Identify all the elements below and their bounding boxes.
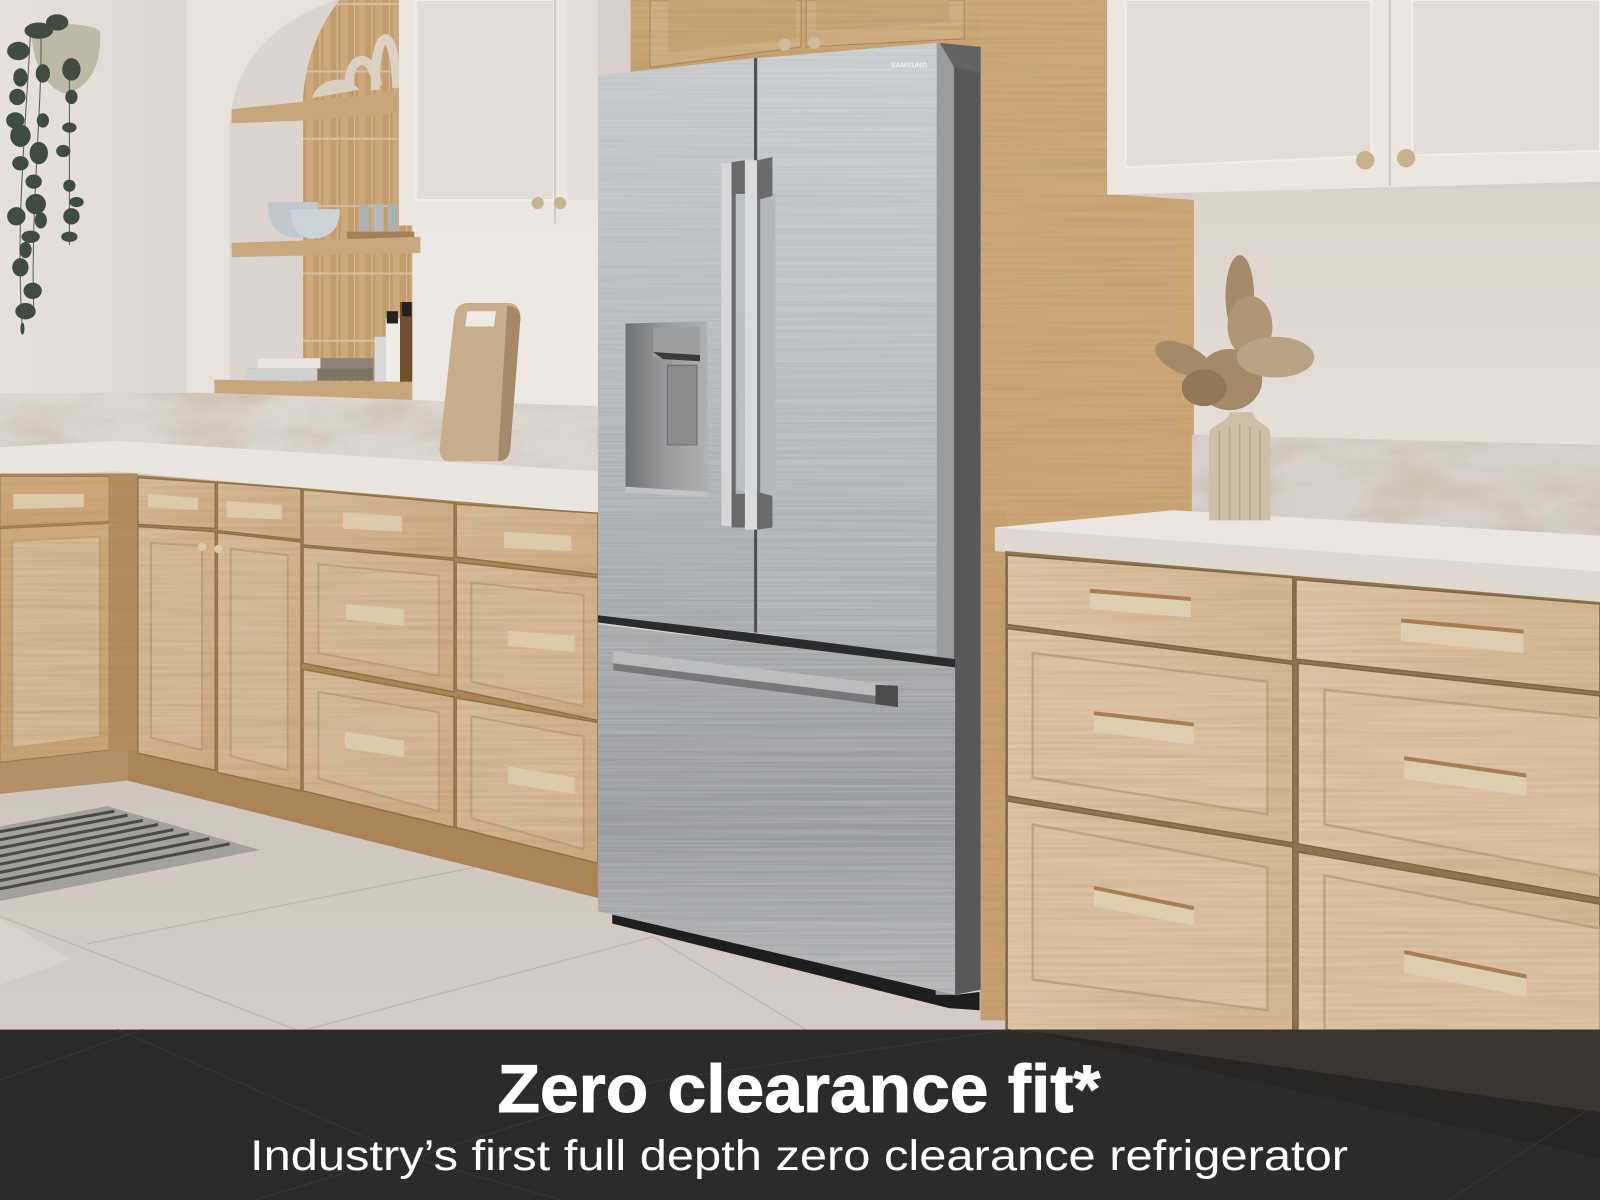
books	[246, 358, 373, 381]
freezer gap	[598, 615, 955, 667]
upper wood cabinet above fridge	[631, 0, 983, 73]
bottles	[374, 302, 412, 382]
brackets	[732, 160, 745, 194]
floating shelves with objects	[214, 39, 420, 400]
subtitle: Industry’s first full depth zero clearance refrigerator	[250, 1132, 1348, 1180]
left brass pulls	[13, 494, 574, 794]
door handles	[721, 157, 776, 530]
cabinet knobs	[532, 197, 566, 209]
recessed cutouts	[737, 192, 745, 492]
right brass pulls	[1090, 589, 1527, 997]
upper right cabinet	[1107, 0, 1600, 195]
bowls	[268, 202, 340, 239]
right base cabinets	[1005, 551, 1600, 1036]
vase with dried flowers	[1150, 255, 1314, 520]
left base cabinets	[0, 473, 598, 898]
floor	[0, 776, 1020, 1041]
knobs	[1356, 149, 1415, 169]
freezer handle	[613, 651, 898, 707]
upper cabinet center	[399, 0, 598, 226]
right bar	[745, 160, 757, 530]
cutting board	[440, 303, 520, 461]
title: Zero clearance fit*	[498, 1051, 1101, 1127]
leaves	[6, 14, 84, 335]
side panels	[936, 43, 981, 995]
dried flowers	[1150, 255, 1314, 410]
rug	[0, 806, 260, 901]
door gap	[754, 58, 757, 633]
left bar	[721, 162, 732, 527]
logo: SAMSUNG	[891, 61, 928, 69]
vase	[1209, 412, 1270, 520]
corner door and drawer	[0, 477, 109, 762]
top shelf	[232, 92, 399, 123]
marble backsplash right	[1192, 435, 1600, 551]
pot	[32, 24, 100, 94]
left door	[598, 58, 754, 633]
bottom shelf	[214, 380, 412, 400]
feet	[612, 913, 980, 1010]
hanging plant	[6, 14, 100, 335]
tall wood column	[981, 0, 1194, 1020]
right counter	[995, 510, 1600, 604]
marble backsplash left	[0, 393, 598, 474]
upper cabinet knobs	[779, 37, 820, 51]
right door	[757, 43, 937, 659]
doors and drawers	[138, 478, 598, 863]
left counter	[0, 441, 598, 513]
bottom banner	[0, 1030, 1600, 1200]
ceramic arch ornaments	[312, 39, 397, 98]
drawer inset panels	[1033, 653, 1600, 1033]
drawer inset panels	[12, 537, 584, 849]
water dispenser	[626, 321, 708, 497]
middle shelf	[232, 237, 420, 257]
toe kick	[0, 748, 128, 794]
stems	[20, 31, 69, 332]
alcove tile panel	[303, 0, 412, 388]
spice jars	[347, 204, 414, 239]
freezer drawer	[598, 624, 955, 995]
refrigerator	[598, 43, 981, 1010]
